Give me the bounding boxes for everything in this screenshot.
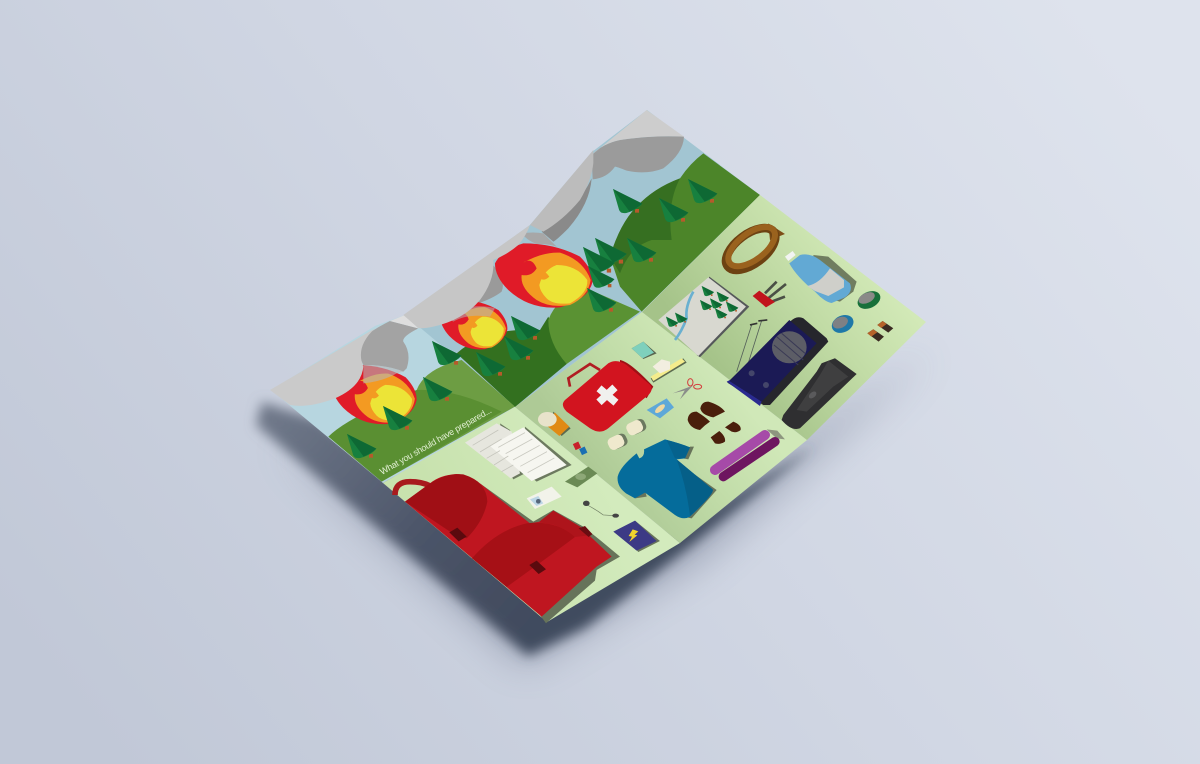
icon: backpack xyxy=(395,474,620,623)
cloud: light left xyxy=(270,328,375,406)
icon: tissue and note xyxy=(651,358,687,383)
hill: far right mountain xyxy=(610,153,760,312)
icon: documents xyxy=(465,423,572,482)
icon: power bank xyxy=(613,521,660,552)
caption: What you should have prepared... xyxy=(378,405,493,477)
cloud: dark top xyxy=(592,136,684,179)
icon: socks xyxy=(688,402,741,444)
panel: kit left xyxy=(383,407,680,622)
panel: kit middle xyxy=(515,312,807,543)
icon: rope coil xyxy=(719,220,785,278)
translucent smoke over fire xyxy=(363,365,403,383)
cloud: light top xyxy=(592,110,684,155)
icon: sleeping mat xyxy=(715,429,785,477)
icon: cash xyxy=(565,467,597,487)
fire: medium xyxy=(440,300,507,349)
cloud: dark band upper xyxy=(542,178,592,242)
fire: large xyxy=(495,243,593,308)
icon: pocket knife xyxy=(753,282,786,307)
icon: tablets xyxy=(573,442,587,455)
icon: flashlight xyxy=(782,358,857,429)
icon: food packet xyxy=(647,398,674,418)
icon: earphones xyxy=(583,501,619,518)
smoke behind fires xyxy=(355,136,684,372)
cloud: grey middle xyxy=(473,263,503,304)
icon: scissors xyxy=(673,379,702,399)
cloud: grey left xyxy=(355,321,418,372)
icon: batteries xyxy=(867,321,893,342)
icon: bandage rolls xyxy=(606,417,648,451)
fire: small left xyxy=(332,365,417,424)
icon: small tins xyxy=(829,288,883,336)
icon: jar xyxy=(538,412,571,436)
icon: teal pouch xyxy=(632,342,657,359)
trees xyxy=(347,179,717,458)
soft paper shadow xyxy=(256,350,935,665)
cloud sliver xyxy=(390,315,418,328)
icon: water bottle xyxy=(785,251,857,303)
hills xyxy=(328,153,760,482)
cloud: grey small xyxy=(522,232,557,247)
hill: front left upper xyxy=(365,360,515,482)
hill: front left lower xyxy=(328,390,502,482)
icon: first aid kit xyxy=(563,360,653,432)
sky shade right xyxy=(405,110,720,407)
icon: id card xyxy=(527,487,562,509)
icon: map xyxy=(658,277,749,357)
panel: kit right xyxy=(642,195,926,440)
panel: wildfire scene sky xyxy=(271,110,760,483)
icon: radio with antennas xyxy=(727,317,828,406)
icon: t-shirt xyxy=(618,439,717,518)
smoke in front xyxy=(270,110,684,406)
hill: centre dark xyxy=(457,317,567,407)
hill: middle light xyxy=(548,288,640,364)
cloud: light middle xyxy=(403,225,530,328)
cloud: translucent over medium fire xyxy=(447,306,495,322)
paper folded sheet xyxy=(270,110,926,623)
cloud: light upper xyxy=(530,150,593,232)
